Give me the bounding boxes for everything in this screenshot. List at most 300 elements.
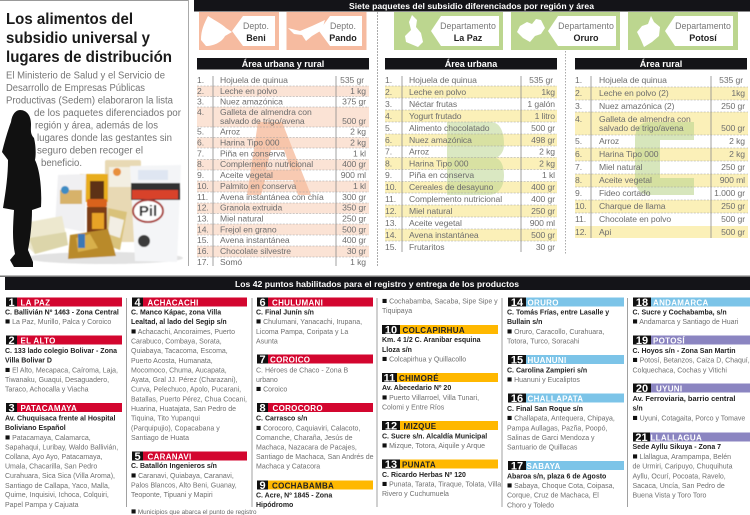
intro text block: lugares donde las gestantes sin — [37, 133, 172, 144]
table: package A: 16. — [197, 246, 209, 256]
intro text block: región y área, además de los — [35, 120, 158, 132]
entry 4 Achacachi: Batallas, Puerto Pérez, Chua Cocani, — [131, 396, 247, 403]
table: package B: 1 kl — [542, 170, 555, 180]
entry 15 Huanuni: ■ Huanuni y Eucaliptos — [507, 374, 580, 384]
table: package A: 300 gr — [342, 192, 366, 202]
entry 21 Llallagua — [632, 432, 750, 500]
entry 14 Oruro — [507, 297, 624, 346]
entry 17 Sabaya: ■ Sabaya, Choque Cota, Coipasa, — [507, 480, 615, 490]
entry 3 Patacamaya: Collana, Ayo Ayo, Patacamaya, — [5, 454, 102, 461]
entry 8 Corocoro: ■ Corocoro, Caquiaviri, Calacoto, — [256, 422, 360, 432]
table: package A: Hojuela de quinua — [220, 75, 288, 85]
panel: map Beni: Depto. — [243, 21, 269, 31]
table: package B: 9. — [385, 170, 392, 180]
entry 21 Llallagua: Sede Ayllu Sikuya - Zona 7 — [632, 444, 721, 451]
entry 16 Challapata: CHALLAPATA — [528, 394, 583, 404]
entry 3 Patacamaya: Santiago de Callapa, Yaco, Malla, — [5, 483, 110, 490]
entry 2 El Alto: ■ El Alto, Mecapaca, Caíroma, Laja, — [5, 364, 118, 374]
entry 2 El Alto: EL ALTO — [20, 336, 56, 346]
table: package A: Somó — [220, 257, 242, 267]
entry 11 Chimoré: 11 — [384, 372, 395, 384]
panel: map Potosí: Departamento — [675, 21, 731, 31]
heading: Área urbana y rural — [197, 58, 369, 70]
entry 4 Achacachi: Huarina, Huatajata, San Pedro de — [131, 406, 236, 413]
table: package C: Api — [599, 227, 611, 237]
table: package B: 1. — [385, 75, 392, 85]
entry 16 Challapata: Salinas de Garci Mendoza y — [507, 435, 595, 442]
entry 8 Corocoro — [256, 402, 374, 470]
entry 11 Chimoré: CHIMORÉ — [399, 374, 439, 383]
heading: Área urbana — [385, 58, 557, 70]
table: package B: 11. — [385, 194, 396, 204]
table: package B: 1 galón — [527, 99, 555, 109]
entry 14 Oruro: Bullain s/n — [507, 319, 542, 326]
entry 19 Potosí: C. Hoyos s/n - Zona San Martin — [632, 348, 736, 355]
entry 8 Corocoro: Machaca y Catacora — [256, 464, 320, 470]
intro text block: seguro deben recoger el — [37, 146, 143, 156]
table: package C: 2 kg — [729, 136, 745, 146]
intro text block: de los paquetes diferenciados por — [34, 108, 182, 119]
entry 19 Potosí — [632, 335, 750, 374]
table: package B: 10. — [385, 182, 397, 192]
entry 15 Huanuni: C. Carolina Zampieri s/n — [507, 368, 587, 374]
table: package C: 500 gr — [721, 214, 745, 224]
entry 13 Punata — [382, 459, 501, 498]
table: package C: 10. — [575, 201, 587, 211]
entry 3 Patacamaya: Av. Chuquisaca frente al Hospital — [5, 416, 116, 422]
table: package C: 4. — [575, 114, 582, 124]
entry 5 Caranavi: CARANAVI — [148, 452, 192, 462]
title: subsidio universal y — [6, 30, 150, 47]
entry 14 Oruro: ORURO — [528, 298, 559, 308]
table: package A: 375 gr — [342, 96, 366, 106]
table: package A: Complemento nutricional — [220, 159, 313, 169]
entry 8 Corocoro: Machaca, Nazacara de Pacajes, — [256, 444, 357, 452]
entry 10 Colcapirhua: Lloza s/n — [382, 347, 412, 354]
table: package B: Yogurt frutado — [409, 111, 462, 121]
entry 9 Cochabamba: Tiquipaya — [382, 308, 412, 315]
entry 12 Mizque: C. Sucre s/n. Alcaldía Municipal — [382, 434, 487, 440]
heading: Área rural: Área rural — [640, 59, 682, 69]
entry 19 Potosí: POTOSÍ — [653, 336, 685, 346]
table: package C: 500 gr — [721, 123, 745, 133]
entry 1 La Paz: LA PAZ — [20, 298, 50, 308]
table: package C: 6. — [575, 149, 582, 159]
table: package A: 250 gr — [342, 214, 366, 224]
panel: map Oruro: Departamento — [558, 21, 614, 31]
table: package C: Hojuela de quinua — [599, 75, 667, 85]
table: package A: 1. — [197, 75, 204, 85]
entry 14 Oruro: Totora, Turco, Soracahi — [507, 338, 580, 346]
entry 9 Cochabamba: ■ Cochabamba, Sacaba, Sipe Sipe y — [382, 296, 498, 306]
panel: map Potosí: Potosí — [689, 33, 717, 43]
entry 4 Achacachi: Lealtad, al lado del Segip s/n — [131, 319, 227, 326]
header bar: paquetes: Siete paquetes del subsidio diferenciados por región y área — [349, 1, 594, 11]
entry 18 Andamarca: ■ Andamarca y Santiago de Huari — [632, 316, 739, 326]
entry 7 Coroico: COROICO — [270, 356, 310, 364]
entry 9 Cochabamba: 9 — [259, 480, 266, 492]
entry 4 Achacachi: Carabuco, Combaya, Sorata, — [131, 338, 222, 346]
table: package A: 2 kg — [350, 126, 366, 136]
entry 5 Caranavi: Palos Blancos, Alto Beni, Guanay, — [131, 482, 237, 490]
entry 21 Llallagua: de Urmiri, Caripuyo, Chuquihuta — [632, 464, 733, 471]
table: package B: 2 kg — [539, 146, 555, 156]
entry 16 Challapata: Pampa Aullagas, Pazña, Poopó, — [507, 425, 607, 432]
entry 4 Achacachi: Ayata, Gral JJ. Pérez (Charazani), — [131, 377, 238, 384]
table: package B: 1 litro — [535, 111, 555, 121]
table: package B: Frutaritos — [409, 242, 444, 252]
entry 4 Achacachi: ■ Achacachi, Ancoraimes, Puerto — [131, 326, 235, 336]
table: package A: Aceite vegetal — [220, 170, 273, 180]
table: package B: 5. — [385, 123, 392, 133]
entry 3 Patacamaya: Quime, Inquisivi, Ichoca, Colquiri, — [5, 492, 109, 499]
entry 2 El Alto: C. 133 lado colegio Bolivar - Zona — [5, 348, 117, 355]
entry 9 Cochabamba: C. Acre, Nº 1845 - Zona — [256, 492, 332, 500]
entry 12 Mizque: ■ Mizque, Totora, Aiquile y Arque — [382, 440, 485, 450]
table: package B: 12. — [385, 206, 397, 216]
panel: map Beni: Beni — [246, 33, 266, 43]
entry 2 El Alto: Villa Bolivar D — [5, 358, 52, 365]
table: package B: Harina Tipo 000 — [409, 158, 469, 168]
entry 21 Llallagua: Sacaca, Uncía, San Pedro de — [632, 483, 725, 490]
table: package A: 7. — [197, 148, 204, 158]
table: package C: Fideo cortado — [599, 188, 651, 198]
table: package B: Cereales de desayuno — [409, 182, 494, 192]
table: package B: 1kg — [541, 87, 555, 97]
panel: map Pando — [286, 12, 366, 50]
table: package C: Harina Tipo 000 — [599, 149, 659, 159]
table: package B: 900 ml — [530, 218, 555, 228]
intro text block: El Ministerio de Salud y el Servicio de — [6, 70, 165, 82]
table: package B: Avena instantánea — [409, 230, 479, 240]
entry 20 Uyuni: UYUNI — [656, 384, 682, 394]
table: package A: 350 gr — [342, 202, 366, 212]
table: package A: Harina Tipo 000 — [220, 138, 280, 148]
table: package B: Piña en conserva — [409, 170, 474, 180]
table: package B: 400 gr — [531, 182, 555, 192]
table: package A: Leche en polvo — [220, 86, 277, 96]
table: package A: Palmito en conserva — [220, 181, 297, 191]
entry 13 Punata: Rivero y Cuchumuela — [382, 491, 449, 498]
table: package B: Alimento chocolatado — [409, 123, 490, 133]
entry 11 Chimoré: ■ Puerto Villarroel, Villa Tunari, — [382, 392, 479, 402]
entry 12 Mizque: 12 — [385, 420, 397, 432]
entry 5 Caranavi — [131, 451, 247, 499]
table: package A: 2. — [197, 86, 204, 96]
entry 6 Chulumani: ■ Chulumani, Yanacachi, Irupana, — [256, 316, 362, 326]
table: package C: 8. — [575, 175, 582, 185]
entry 21 Llallagua: Ayllu, Ocurí, Pocoata, Ravelo, — [632, 473, 726, 480]
entry 7 Coroico — [256, 354, 373, 394]
panel: map Oruro: Oruro — [573, 33, 599, 43]
entry 9 Cochabamba — [256, 296, 498, 509]
icon: food products photo: Pil — [139, 203, 157, 220]
heading: Área urbana: Área urbana — [445, 59, 498, 69]
title — [6, 11, 172, 66]
table: package C: 7. — [575, 162, 582, 172]
table: package B: 400 gr — [531, 194, 555, 204]
entry 14 Oruro: 14 — [511, 297, 524, 309]
heading: Área urbana y rural: Área urbana y rural — [242, 59, 324, 69]
table: package C: Aceite vegetal — [599, 175, 652, 185]
table: package B: 14. — [385, 230, 397, 240]
entry 18 Andamarca — [632, 297, 750, 326]
entry 13 Punata: PUNATA — [402, 460, 436, 470]
entry 9 Cochabamba: Hipódromo — [256, 502, 293, 509]
entry 5 Caranavi: C. Batallón Ingenieros s/n — [131, 463, 217, 470]
entry 3 Patacamaya: Sapahaqui, Luribay, Waldo Ballivián, — [5, 444, 118, 452]
entry 7 Coroico: 7 — [259, 354, 266, 366]
entry 2 El Alto: 2 — [8, 335, 15, 347]
entry 1 La Paz: 1 — [8, 297, 15, 309]
table: package A: Galleta de almendra con — [220, 107, 312, 117]
table: package A: Chocolate silvestre — [220, 246, 291, 256]
entry 8 Corocoro: 8 — [259, 402, 266, 414]
letter A — [247, 122, 311, 195]
entry 3 Patacamaya: Curahuara, Sica Sica (Villa Aroma), — [5, 473, 115, 480]
table: package A: 17. — [197, 257, 209, 267]
entry 8 Corocoro: COROCORO — [272, 404, 323, 413]
table: package C: Nuez amazónica (2) — [599, 101, 675, 111]
table: package C: 1kg — [731, 88, 745, 98]
entry 15 Huanuni: HUANUNI — [528, 356, 566, 365]
entry 5 Caranavi: Teoponte, Tipuani y Mapiri — [131, 492, 213, 499]
table: package A: Frejol en grano — [220, 224, 277, 234]
table: package C: 5. — [575, 136, 582, 146]
table: package B: 3. — [385, 99, 392, 109]
entry 19 Potosí: ■ Potosí, Betanzos, Caiza D, Chaquí, — [632, 355, 750, 365]
entry 4 Achacachi: Mocomoco, Chuma, Aucapata, — [131, 368, 227, 374]
table: package B — [385, 58, 557, 252]
table: package C: Galleta de almendra con — [599, 114, 691, 124]
table: package C: 900 ml — [720, 175, 745, 185]
table: package B: 13. — [385, 218, 397, 228]
table: package A: Granola extruida — [220, 202, 282, 212]
entry 3 Patacamaya: 3 — [8, 402, 15, 414]
entry 16 Challapata: ■ Challapata, Antequera, Chipaya, — [507, 413, 615, 423]
table: package A: Nuez amazónica — [220, 96, 283, 106]
table: package A: 8. — [197, 159, 204, 169]
entry 17 Sabaya: 17 — [511, 460, 523, 472]
entry 5 Caranavi: ■ Caranavi, Quiabaya, Caranavi, — [131, 470, 234, 480]
intro text block — [6, 70, 182, 169]
entry 7 Coroico: ■ Coroico — [256, 384, 287, 394]
table: package A: 15. — [197, 235, 209, 245]
entry 14 Oruro: ■ Oruro, Caracollo, Curahuara, — [507, 326, 604, 336]
entry 10 Colcapirhua: 10 — [385, 324, 397, 336]
table: package B: Complemento nutricional — [409, 194, 502, 204]
panel: map La Paz — [394, 12, 503, 50]
entry 3 Patacamaya: PATACAMAYA — [20, 404, 77, 413]
table: package A: 3. — [197, 96, 204, 106]
entry 21 Llallagua: 21 — [635, 432, 648, 444]
entry 17 Sabaya: Corque, Cruz de Machaca, El — [507, 493, 599, 500]
entry 18 Andamarca: C. Sucre y Cochabamba, s/n — [632, 310, 727, 316]
table: package A: 1 kg — [350, 86, 366, 96]
entry 18 Andamarca: 18 — [636, 297, 648, 309]
entry 21 Llallagua: ■ Llallagua, Arampampa, Belén — [632, 451, 731, 461]
entry 9 Cochabamba: COCHABAMBA — [272, 482, 334, 490]
panel: map Pando: Pando — [329, 33, 357, 43]
entry 10 Colcapirhua: ■ Colcapirhua y Quillacollo — [382, 354, 466, 364]
table: package C: 2 kg — [729, 149, 745, 159]
table: package C: 11. — [575, 214, 586, 224]
table: package C: 535 gr — [719, 75, 743, 85]
table: package A: 535 gr — [340, 75, 364, 85]
entry 20 Uyuni: Av. Ferroviaria, barrio central — [632, 396, 736, 403]
table: package B: Miel natural — [409, 206, 453, 216]
table: package A: 1 kl — [353, 148, 366, 158]
entry 17 Sabaya — [507, 460, 624, 509]
entry 3 Patacamaya: Boliviano Español — [5, 425, 66, 432]
table: package A: 10. — [197, 181, 209, 191]
entry 12 Mizque — [382, 420, 498, 450]
entry 21 Llallagua: Buena Vista y Toro Toro — [632, 493, 707, 500]
entry 3 Patacamaya — [5, 402, 122, 509]
entry 19 Potosí: Colquechaca, Cochas y Vitichi — [632, 367, 727, 374]
table: package A: Miel natural — [220, 214, 264, 224]
table: package C: 250 gr — [721, 101, 745, 111]
entry 4 Achacachi: Curva, Pelechuco, Apolo, Pucarani, — [131, 387, 241, 394]
entry 5 Caranavi: 5 — [134, 451, 141, 463]
entry 18 Andamarca: ANDAMARCA — [653, 298, 709, 308]
entry 1 La Paz: ■ La Paz, Murillo, Palca y Coroico — [5, 316, 111, 326]
table: package A: 14. — [197, 224, 209, 234]
entry 17 Sabaya: Choro y Toledo — [507, 502, 554, 509]
entry 6 Chulumani: Licoma Pampa, Coripata y La — [256, 329, 348, 336]
table: package B: Arroz — [409, 146, 429, 156]
entry 3 Patacamaya: Umala, Chacarilla, San Pedro — [5, 464, 97, 470]
table: package B: 2. — [385, 87, 392, 97]
entry 4 Achacachi: C. Manco Kápac, zona Villa — [131, 310, 221, 316]
intro text block: Desarrollo de Empresas Públicas — [6, 83, 145, 94]
entry 8 Corocoro: Santiago de Machaca, San Andrés de — [256, 454, 374, 461]
table: package B: 8. — [385, 158, 392, 168]
entry 8 Corocoro: Comanche, Charaña, Jesús de — [256, 435, 353, 442]
heading: Área rural — [575, 58, 747, 70]
entry 4 Achacachi: (Parquipujio), Copacabana y — [131, 425, 220, 432]
entry 10 Colcapirhua: COLCAPIRHUA — [402, 326, 465, 335]
entry 2 El Alto: Taraco, Achocalla y Viacha — [5, 386, 89, 394]
icon: food products photo — [26, 160, 183, 264]
panel: map Pando: Depto. — [330, 21, 356, 31]
table: package A: 1 kg — [350, 257, 366, 267]
table: package B: 500 gr — [531, 230, 555, 240]
table: package B: 2 kg — [539, 158, 555, 168]
table: package B: 7. — [385, 146, 392, 156]
entry 17 Sabaya: Abaroa s/n, plaza 6 de Agosto — [507, 474, 606, 480]
table: package A: Avena instantánea con chía — [220, 192, 324, 202]
entry 1 La Paz: C. Ballivián Nº 1463 - Zona Central — [5, 310, 119, 316]
entry 7 Coroico: C. Héroes de Chaco - Zona B — [256, 368, 349, 374]
table: package C: 9. — [575, 188, 582, 198]
entry 4 Achacachi: 4 — [134, 297, 141, 309]
table: package A: 400 gr — [342, 159, 366, 169]
entry 13 Punata: C. Ricardo Herbas Nº 120 — [382, 472, 466, 479]
table: package C: 1. — [575, 75, 582, 85]
table: package B: 4. — [385, 111, 392, 121]
entry 4 Achacachi: Tiquina, Tito Yupanqui — [131, 416, 200, 423]
table: package A: 900 ml — [341, 170, 366, 180]
intro text block: Productivas (Sedem) elaboraron la lista — [6, 96, 173, 106]
table: package A: Avena instantánea — [220, 235, 290, 245]
table: package B: 498 gr — [531, 135, 555, 145]
entry 3 Patacamaya: Papel Pampa y Cajuata — [5, 502, 79, 509]
table: package C: Charque de llama — [599, 201, 666, 211]
panel: map La Paz: Departamento — [440, 21, 496, 31]
table: package B: 535 gr — [529, 75, 553, 85]
table: package C: 250 gr — [721, 162, 745, 172]
entry 14 Oruro: C. Tomás Frías, entre Lasalle y — [507, 310, 609, 316]
title: lugares de distribución — [6, 49, 172, 66]
table: package A: 9. — [197, 170, 204, 180]
entry 7 Coroico: urbano — [256, 377, 278, 384]
title: Los alimentos del — [6, 11, 133, 28]
table: package B: Nuez amazónica — [409, 135, 472, 145]
table: package C: Chocolate en polvo — [599, 214, 671, 224]
entry 16 Challapata — [507, 393, 624, 452]
entry 6 Chulumani — [256, 297, 373, 346]
table: package C: 250 gr — [721, 201, 745, 211]
header bar: puntos habilitados: Los 42 puntos habilitados para el registro y entrega de los productos — [235, 279, 519, 289]
table: package C: 1.000 gr — [714, 188, 745, 198]
entry 4 Achacachi: ACHACACHI — [148, 298, 199, 308]
entry 2 El Alto: Tiwanaku, Guaqui, Desaguadero, — [5, 377, 109, 384]
entry 6 Chulumani: CHULUMANI — [272, 298, 323, 308]
table: package C: Arroz — [599, 136, 619, 146]
table: package A: 2 kg — [350, 138, 366, 148]
table: package C: 500 gr — [721, 227, 745, 237]
table: package A: Piña en conserva — [220, 148, 285, 158]
entry 20 Uyuni: ■ Uyuni, Cotagaita, Porco y Tomave — [632, 412, 745, 422]
table: package B: Néctar frutas — [409, 99, 457, 109]
table: package A: 11. — [197, 192, 208, 202]
header bar: paquetes — [194, 0, 750, 12]
header bar: puntos habilitados — [0, 276, 750, 290]
entry 11 Chimoré: Colomi y Entre Ríos — [382, 404, 445, 412]
entry 20 Uyuni — [632, 383, 750, 422]
entry 4 Achacachi: Quiabaya, Tacacoma, Escoma, — [131, 348, 228, 355]
entry 20 Uyuni: s/n — [632, 406, 643, 413]
entry 3 Patacamaya: ■ Patacamaya, Calamarca, — [5, 432, 91, 442]
entry 16 Challapata: C. Final San Roque s/n — [507, 406, 583, 413]
table: package B: Leche en polvo — [409, 87, 466, 97]
panel: map Potosí — [628, 12, 738, 50]
panel: map La Paz: La Paz — [454, 33, 483, 43]
table: package A: 500 gr — [342, 116, 366, 126]
entry 2 El Alto — [5, 335, 122, 394]
table: package B: Hojuela de quinua — [409, 75, 477, 85]
entry 16 Challapata: 16 — [511, 393, 523, 405]
table: package C: 2. — [575, 88, 582, 98]
table: package A: 13. — [197, 214, 209, 224]
table: package B: 500 gr — [531, 123, 555, 133]
table: package C: 3. — [575, 101, 582, 111]
table: package A: 30 gr — [347, 246, 366, 256]
table: package A: 12. — [197, 202, 209, 212]
table: package A: 1 kl — [353, 181, 366, 191]
entry 1 La Paz — [5, 297, 122, 326]
table: package A: salvado de trigo/avena — [220, 116, 305, 126]
panel: map Beni — [199, 12, 279, 50]
table: package B: 250 gr — [531, 206, 555, 216]
table: package C: 12. — [575, 227, 587, 237]
entry 4 Achacachi: Santiago de Huata — [131, 435, 189, 442]
table: package B: 15. — [385, 242, 397, 252]
entry 8 Corocoro: C. Carrasco s/n — [256, 416, 307, 422]
table: package C: salvado de trigo/avena — [599, 123, 684, 133]
entry 10 Colcapirhua: Km. 4 1/2 C. Aranibar esquina — [382, 337, 481, 344]
